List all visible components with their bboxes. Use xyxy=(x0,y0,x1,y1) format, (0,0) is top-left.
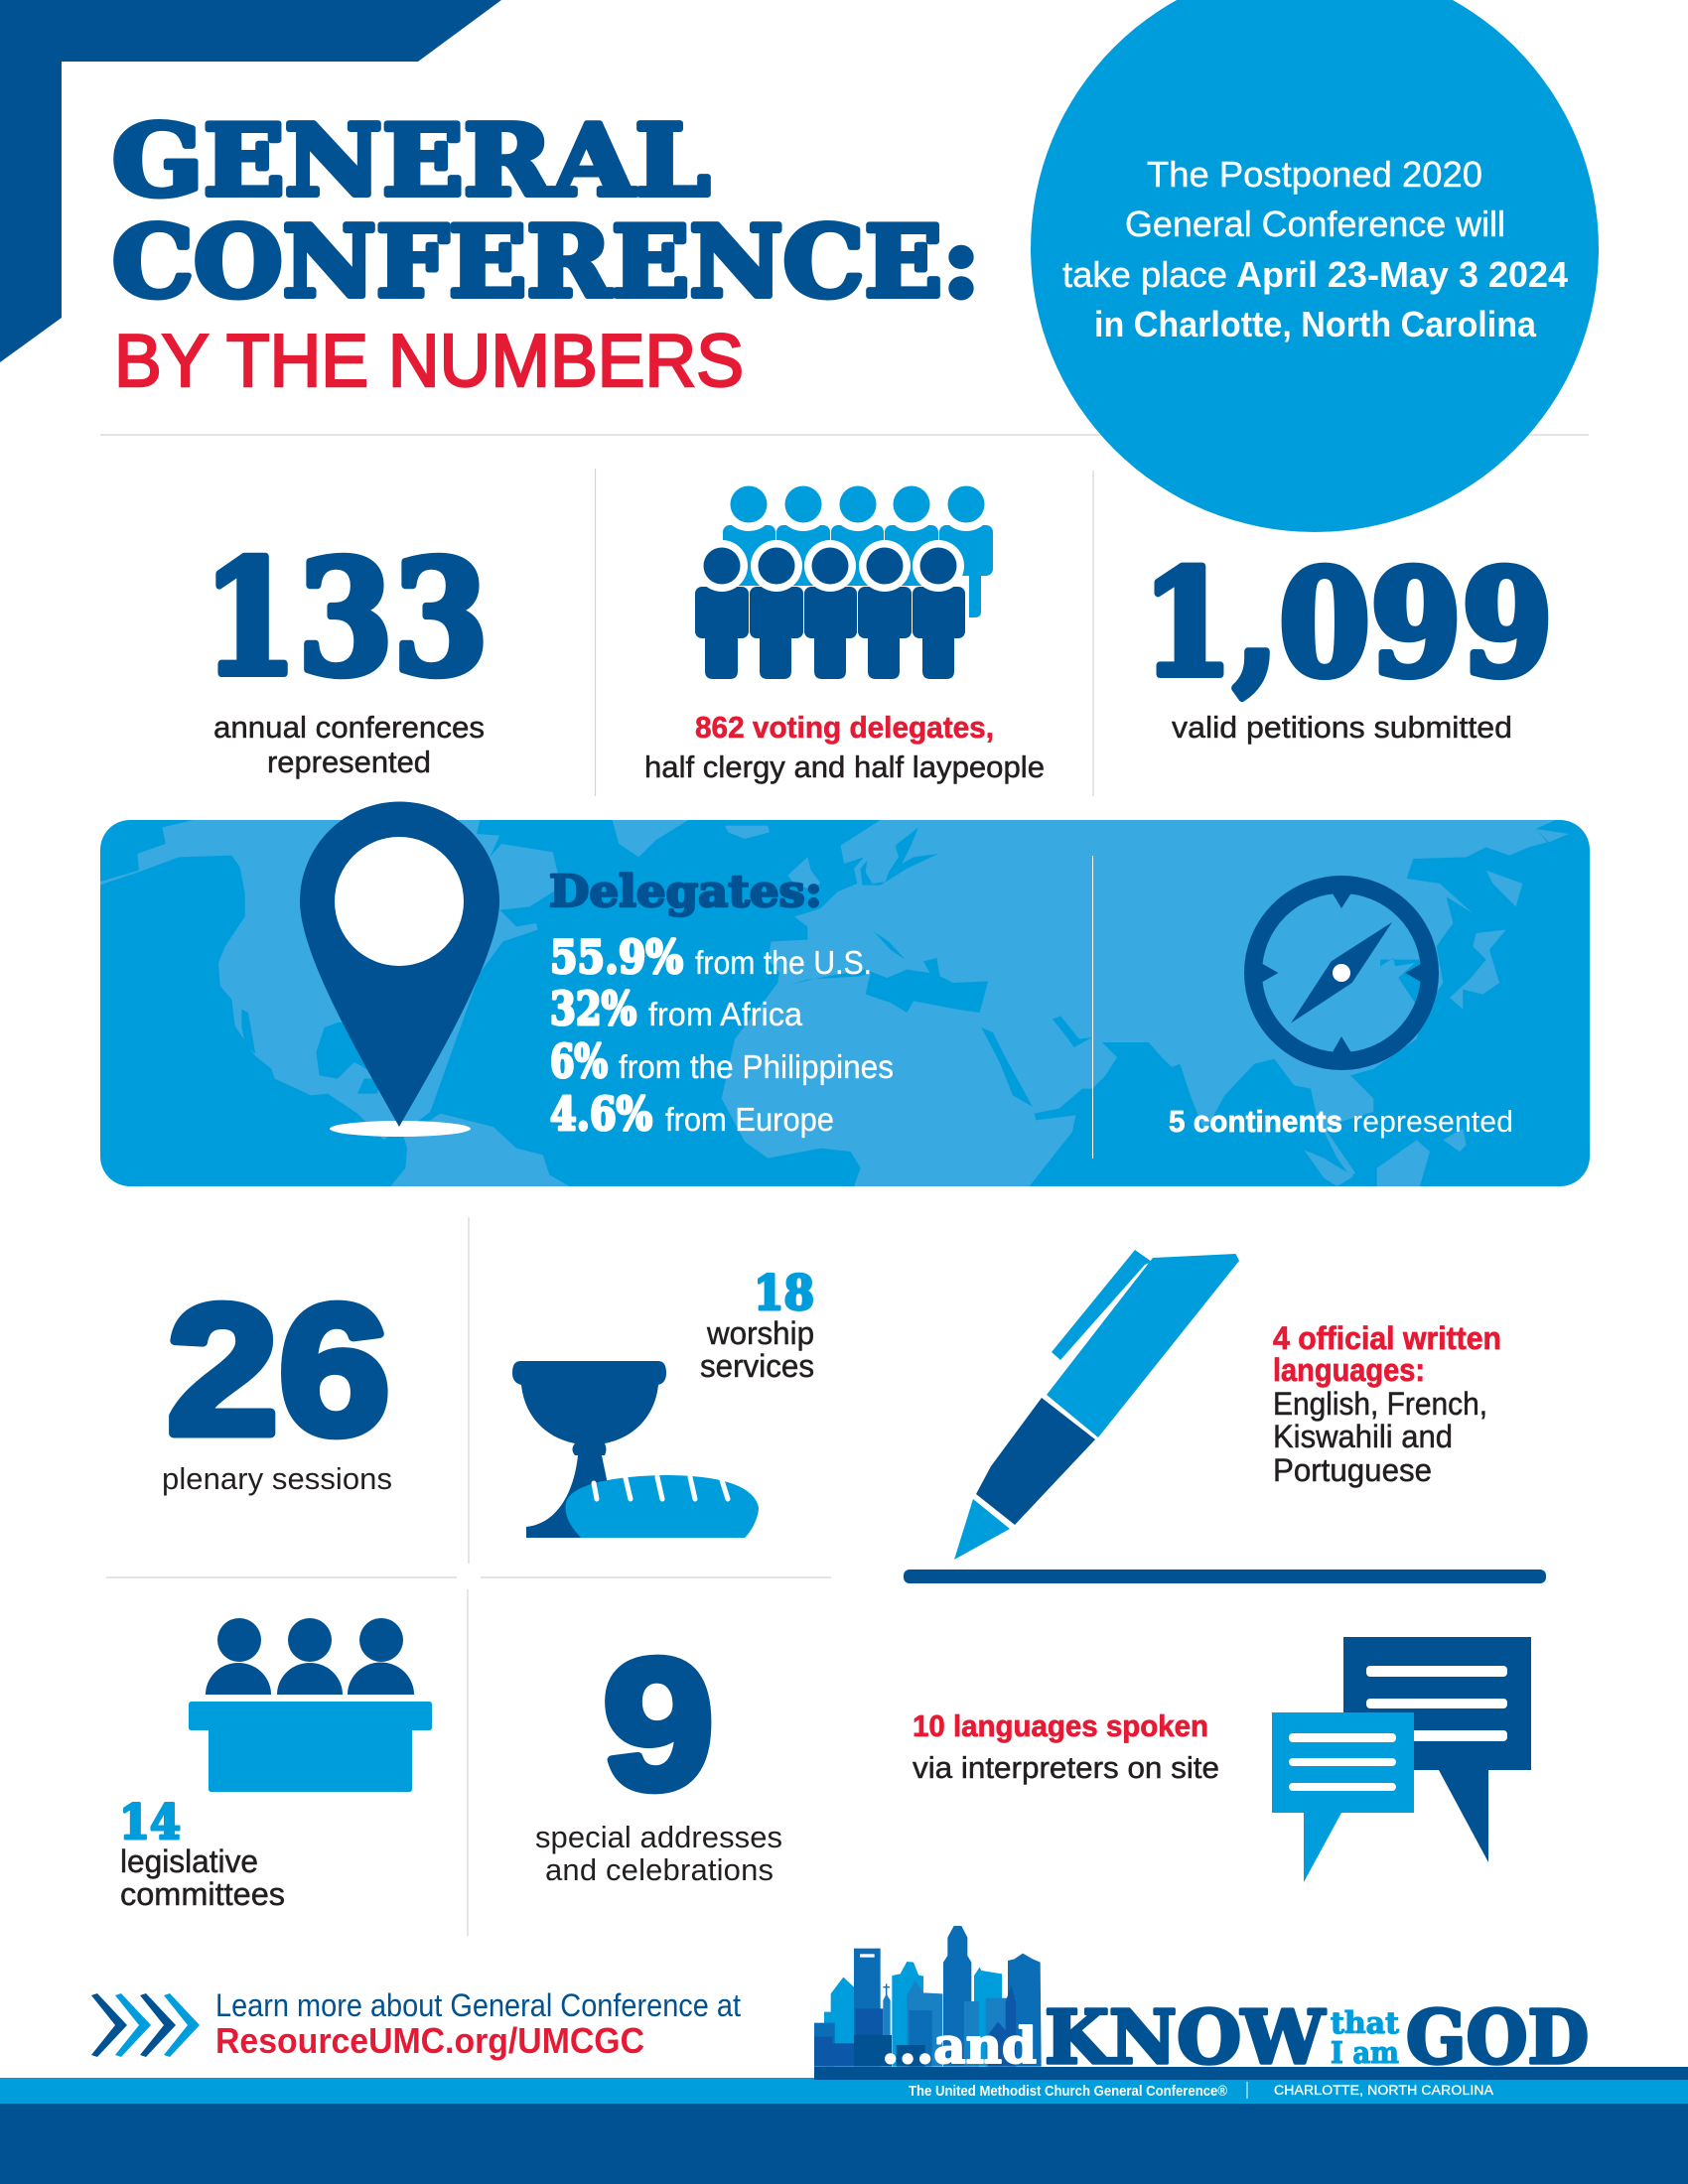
icon: committee at table xyxy=(189,1618,432,1792)
delegate percentages: from Europe xyxy=(665,1101,834,1138)
stat: 4 official languages: languages: xyxy=(1273,1352,1425,1388)
stat: 133 annual conferences xyxy=(203,527,489,779)
stat: 133 annual conferences: 133 xyxy=(203,527,489,711)
stat: 5 continents: 5 continents xyxy=(1169,1104,1342,1139)
icon: location pin xyxy=(300,801,499,1137)
logo: and know that i am god: ...and xyxy=(882,2016,1037,2075)
icon: pen xyxy=(954,1250,1239,1560)
stat: 5 continents xyxy=(1169,1104,1513,1139)
stat: 4 official languages: Portuguese xyxy=(1273,1452,1432,1488)
stat: 4 official languages: Kiswahili and xyxy=(1273,1419,1453,1454)
stat: 5 continents: represented xyxy=(1352,1104,1513,1139)
delegate percentages: from Africa xyxy=(648,996,803,1032)
icon: delegates crowd xyxy=(695,478,993,679)
icon: chevrons xyxy=(91,1993,200,2057)
stat: 14 legislative committees xyxy=(119,1795,285,1912)
panel: delegates world map xyxy=(99,801,1590,1186)
stat: 18 worship services: worship xyxy=(706,1315,814,1351)
stat: 133 annual conferences: annual conferences xyxy=(213,710,485,745)
stat: 10 languages spoken: via interpreters on site xyxy=(913,1750,1219,1785)
icon: speech bubbles xyxy=(1272,1637,1531,1882)
stat: 9 special addresses: 9 xyxy=(603,1622,714,1828)
delegate percentages: 6% xyxy=(550,1034,608,1088)
logo: and know that i am god: KNOW xyxy=(1045,1995,1326,2081)
corner banner xyxy=(0,0,501,362)
stat: 14 legislative committees: 14 xyxy=(119,1795,181,1850)
logo: and know that i am god xyxy=(814,1926,1688,2081)
icon: chalice and bread xyxy=(512,1361,759,1538)
callout circle: date and place: take place xyxy=(1062,254,1227,295)
callout circle: date and place: General Conference will xyxy=(1125,204,1505,244)
heading: delegates: Delegates: xyxy=(549,867,822,917)
delegate percentages: 55.9% xyxy=(550,930,683,984)
stat: 14 legislative committees: committees xyxy=(120,1876,285,1912)
skyline xyxy=(814,1926,1042,2067)
title: CONFERENCE: xyxy=(112,205,980,320)
learn more link xyxy=(215,1987,741,2061)
delegate percentages: from the Philippines xyxy=(619,1048,894,1085)
stat: 862 voting delegates: half clergy and half laypeople xyxy=(644,750,1045,784)
stat: 4 official languages xyxy=(1273,1320,1501,1488)
stat: 862 voting delegates xyxy=(644,710,1045,784)
stat: 133 annual conferences: represented xyxy=(267,745,431,779)
delegate percentages: from the U.S. xyxy=(695,944,872,981)
stat: 14 legislative committees: legislative xyxy=(120,1843,258,1879)
stat: 9 special addresses xyxy=(535,1622,782,1887)
icon: compass xyxy=(1253,885,1430,1061)
callout circle: date and place: April 23-May 3 2024 xyxy=(1236,254,1568,295)
stat: 1,099 petitions: 1,099 xyxy=(1142,539,1553,709)
logo: and know that i am god: GOD xyxy=(1406,1995,1589,2081)
title xyxy=(112,104,980,402)
stat: 18 worship services: 18 xyxy=(754,1266,814,1321)
footer text xyxy=(909,2082,1494,2100)
stat: 9 special addresses: and celebrations xyxy=(545,1852,774,1887)
stat: 10 languages spoken xyxy=(913,1708,1219,1785)
stat: 4 official languages: 4 official written xyxy=(1273,1320,1501,1356)
callout circle: date and place: in Charlotte, North Carolina xyxy=(1094,304,1537,344)
divider bar xyxy=(904,1570,1546,1583)
logo: and know that i am god: that xyxy=(1331,2006,1399,2041)
stat: 9 special addresses: special addresses xyxy=(535,1820,782,1854)
stat: 4 official languages: English, French, xyxy=(1273,1386,1487,1422)
callout circle: date and place xyxy=(1031,0,1599,532)
footer band xyxy=(0,2078,1688,2184)
footer text: The United Methodist Church General Conference® xyxy=(909,2083,1227,2100)
title: BY THE NUMBERS xyxy=(114,319,744,402)
delegate percentages: 32% xyxy=(550,982,636,1035)
delegate percentages: 4.6% xyxy=(550,1087,652,1141)
delegate percentages xyxy=(550,930,894,1141)
stat: 1,099 petitions: valid petitions submitted xyxy=(1172,710,1512,745)
callout circle: date and place: The Postponed 2020 xyxy=(1147,154,1482,195)
title: GENERAL xyxy=(112,104,710,218)
learn more link: ResourceUMC.org/UMCGC xyxy=(215,2020,644,2061)
stat: 26 plenary sessions: 26 xyxy=(167,1268,390,1473)
learn more link: Learn more about General Conference at xyxy=(215,1987,741,2023)
footer text: CHARLOTTE, NORTH CAROLINA xyxy=(1274,2082,1494,2098)
stat: 862 voting delegates: 862 voting delegates, xyxy=(695,710,994,745)
stat: 26 plenary sessions: plenary sessions xyxy=(162,1461,392,1496)
stat: 18 worship services: services xyxy=(700,1348,814,1384)
logo: and know that i am god: I am xyxy=(1331,2036,1399,2071)
stat: 10 languages spoken: 10 languages spoken xyxy=(913,1708,1208,1743)
stat: 18 worship services xyxy=(700,1266,814,1384)
